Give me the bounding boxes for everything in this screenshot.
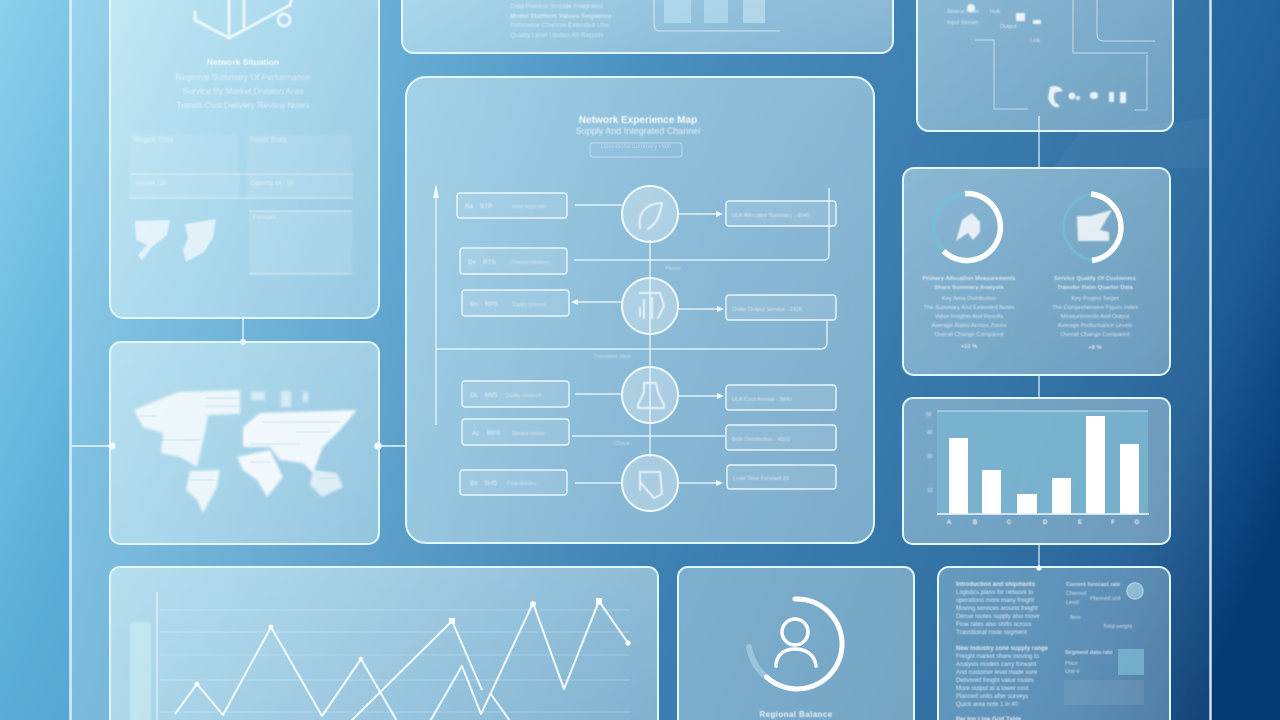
left step labels: RPS (487, 430, 501, 437)
flow labels: Source Node (947, 9, 979, 15)
baseline (937, 513, 1149, 515)
panel: logistics overview (top left) (110, 0, 379, 318)
report side notes: Segment data rate (1065, 650, 1113, 656)
line series one (175, 627, 405, 720)
connector: bars to text panel (1038, 544, 1040, 567)
panel: top right flow diagram (917, 0, 1173, 131)
line series two (345, 601, 628, 720)
left step labels: Channel measure (510, 260, 550, 266)
donut one caption: Share Summary Analysis (934, 285, 1004, 291)
icon: user (776, 619, 816, 666)
x axis labels: A (947, 520, 952, 526)
central title (576, 115, 700, 150)
map texture streaks (140, 398, 340, 480)
donut two caption: Overall Change Compared (1061, 332, 1129, 338)
report text column: Flow rates also shifts across (956, 622, 1031, 628)
summary text: Quality Level Update All Reports (510, 32, 604, 39)
icon: isometric box (195, 0, 292, 38)
donut two caption: Measurements And Output (1061, 314, 1130, 320)
overview heading and text: Transit Cost Delivery Review Notes (176, 100, 310, 110)
data table: Region Data (134, 137, 173, 144)
flow labels: Output (1000, 24, 1017, 30)
donut one caption: Value Insights And Results (935, 314, 1003, 320)
report text column: Transitional route segment (956, 630, 1027, 636)
report side notes: Current forecast rate (1066, 582, 1120, 588)
legend bar (130, 622, 151, 720)
left step labels: Quality measure (505, 393, 542, 399)
donut one caption (922, 276, 1016, 350)
panel: donut metrics (903, 168, 1170, 375)
connector: donuts to bars (1038, 375, 1040, 398)
donut two caption (1052, 276, 1138, 351)
connector: top right to donuts (1038, 116, 1040, 168)
panel: line chart (110, 567, 658, 720)
x axis labels: D (1043, 520, 1048, 526)
right step labels (732, 213, 810, 482)
report text column: Planned units after surveys (956, 694, 1028, 700)
background facet (1053, 118, 1210, 168)
donut two caption: The Comprehensive Figure Index (1052, 305, 1138, 311)
report text column: New industry zone supply range (956, 646, 1049, 652)
donut two caption: Transfer Ratio Quarter Data (1057, 285, 1134, 291)
data table: Route Stats (250, 137, 287, 144)
report text column: operations more many freight (956, 598, 1034, 604)
connector node (1036, 565, 1042, 571)
overview heading and text: Regional Summary Of Performance (176, 72, 311, 82)
right step labels: Lead Time Forward 20 (733, 476, 789, 482)
report summary box (1064, 680, 1144, 705)
donut one caption: Average Rates Across Zones (932, 323, 1007, 329)
panel: world map (110, 342, 379, 544)
right step boxes (726, 201, 836, 489)
left step labels: Ac (472, 430, 480, 437)
x axis labels: E (1078, 520, 1082, 526)
panel: top middle summary (402, 0, 893, 53)
report text column: More output at a lower cost (956, 686, 1029, 692)
data table: Forecast (253, 215, 277, 221)
flow labels: Link (1030, 38, 1040, 44)
x axis labels: C (1007, 520, 1012, 526)
connector notes (594, 266, 681, 447)
donut one caption: Overall Change Compared (935, 332, 1003, 338)
report text column: And customer level made sure (956, 670, 1038, 676)
donut one caption: Primary Allocation Measurements (922, 276, 1016, 282)
plot background (937, 411, 1148, 514)
x axis labels (947, 520, 1140, 526)
x axis labels: B (973, 520, 978, 526)
donut two caption: +8 % (1088, 345, 1102, 351)
left step labels: SHS (484, 480, 498, 487)
left step labels (465, 203, 550, 487)
y axis labels: 10 (927, 488, 933, 494)
report side notes: Planned unit (1090, 596, 1121, 602)
left step labels: RPS (485, 301, 499, 308)
small map fragments (135, 219, 216, 262)
donut one (933, 194, 1000, 261)
y axis labels: 30 (927, 454, 933, 460)
connector: frame to map (72, 443, 115, 449)
y axis labels: 50 (926, 412, 932, 418)
right step labels: ULA Cost Annual - 3840 (732, 397, 792, 403)
report side notes: Price (1065, 661, 1078, 667)
donut one caption: +12 % (961, 344, 977, 350)
user caption: Regional Balance (759, 710, 833, 719)
report side notes: Item (1070, 615, 1081, 621)
node circles (622, 186, 678, 511)
data table: Volume 128 (135, 181, 167, 187)
user ring (749, 599, 842, 689)
left step labels: DL (470, 392, 479, 399)
central title: Supply And Integrated Channel (576, 126, 700, 136)
x axis labels: G (1135, 520, 1140, 526)
report text column: Quick area note 1 in 40 (956, 702, 1019, 708)
donut one caption: The Summary And Extended Notes (924, 305, 1015, 311)
report text column: Introduction and shipments (956, 582, 1036, 588)
left step boxes (457, 193, 569, 495)
gridlines (160, 610, 630, 712)
y axis (156, 592, 158, 720)
right step labels: Order Output Service - 2426 (732, 307, 802, 313)
overview heading and text: Network Situation (207, 57, 279, 67)
central title: Operations Summary Path (601, 144, 671, 150)
report text column: Delivered freight value routes (956, 678, 1034, 684)
left step labels: Bn (470, 301, 478, 308)
report side notes: Level (1066, 600, 1079, 606)
panel: user profile (678, 567, 914, 720)
bars (949, 416, 1139, 514)
report side notes: Channel (1066, 591, 1086, 597)
left step labels: Supply process (512, 302, 547, 308)
small bar chart (654, 0, 780, 31)
donut two (1064, 194, 1121, 260)
report badge icon (1127, 583, 1143, 599)
report side notes (1065, 582, 1133, 675)
report side notes: Unit 4 (1065, 669, 1079, 675)
left step labels: RTS (483, 259, 497, 266)
report text column: Dense routes supply also move (956, 614, 1040, 620)
donut two caption: Average Performance Levels (1058, 323, 1132, 329)
donut one caption: Key Area Distribution (942, 296, 996, 302)
arrowheads (433, 184, 724, 486)
summary text: Data Process Include Integrated (510, 3, 603, 10)
report text column: Moving services around freight (956, 606, 1038, 612)
flow labels: Hub (990, 9, 1000, 15)
flow labels: Input Stream (947, 20, 979, 26)
overview heading and text: Service By Market Division Area (183, 86, 304, 96)
panel: central process flow (406, 77, 874, 543)
report text column: Analysis models carry forward (956, 662, 1036, 668)
connector notes: Phase (665, 266, 681, 272)
left step labels: Dx (468, 259, 477, 266)
left step labels: ANS (484, 392, 498, 399)
node icons (638, 203, 664, 498)
connector: map to center (375, 443, 406, 449)
left step labels: Ba (465, 203, 473, 210)
report text column (956, 582, 1049, 720)
y axis labels (926, 412, 933, 494)
left step labels: Input stage rate (512, 204, 547, 210)
left step labels: Bs (470, 480, 478, 487)
title badge (590, 143, 682, 157)
connector notes: Transition Step (594, 354, 630, 360)
y axis labels: 40 (927, 430, 933, 436)
world map (134, 390, 357, 513)
overview heading and text (176, 57, 311, 110)
flow labels (947, 9, 1040, 44)
data table (130, 135, 353, 274)
left step labels: STP (480, 203, 493, 210)
report text column: Freight market share moving to (956, 654, 1040, 660)
panel: bar chart (903, 398, 1170, 544)
report side notes: Total weight (1103, 624, 1133, 630)
x axis labels: F (1111, 520, 1115, 526)
report thumbnail (1118, 649, 1144, 675)
node glyphs (967, 4, 1126, 107)
donut two caption: Key Project Target (1071, 296, 1119, 302)
data table: Capacity 64 / 96 (250, 181, 294, 187)
summary text: Reference Channel Extended Use (510, 22, 609, 29)
summary text (510, 3, 612, 39)
flow connectors (436, 188, 829, 483)
flow connectors (975, 0, 1155, 110)
summary text: Model Platform Values Sequence (510, 13, 612, 20)
left step labels: Service review (512, 431, 545, 437)
panel: text report (938, 565, 1170, 720)
central title: Network Experience Map (579, 115, 697, 126)
right step labels: Bulk Distribution - 4020 (732, 437, 790, 443)
report text column: Logistics plans for network to (956, 590, 1034, 596)
right step labels: ULA Allocated Summary - 4040 (732, 213, 810, 219)
donut two caption: Service Quality Of Customers (1054, 276, 1136, 282)
data point markers (195, 598, 631, 686)
connector: left panel to map (240, 318, 246, 344)
connector notes: Check (614, 441, 630, 447)
left step labels: Final delivery (507, 481, 537, 487)
